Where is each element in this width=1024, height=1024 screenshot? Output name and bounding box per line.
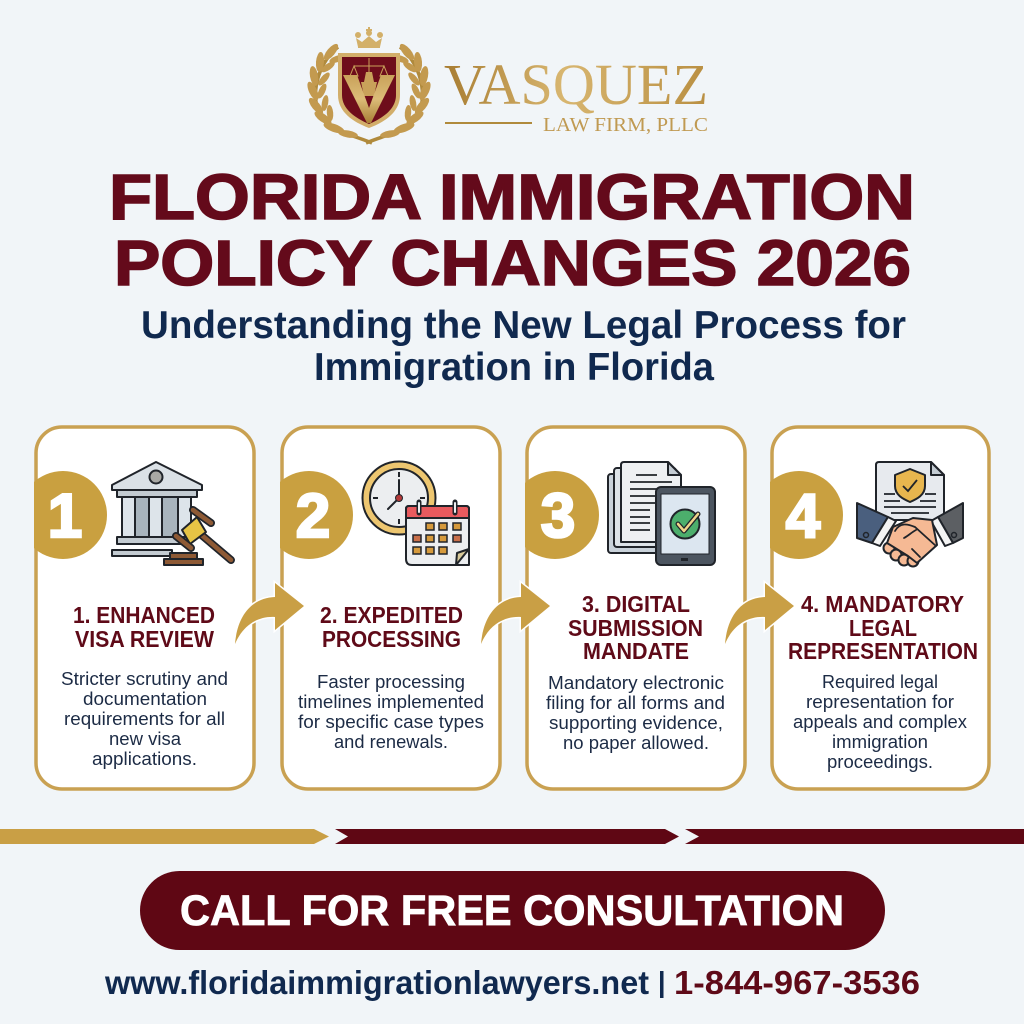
description: Mandatory electronic: [548, 672, 724, 693]
title: FLORIDA IMMIGRATION: [109, 161, 915, 233]
description: supporting evidence,: [549, 712, 723, 733]
heading: 3. DIGITAL: [582, 591, 690, 617]
contact line: www.floridaimmigrationlawyers.net: [104, 964, 649, 1001]
icon: documents and tablet: [608, 462, 715, 565]
arrow: step 2 to 3: [481, 583, 550, 644]
description: appeals and complex: [793, 711, 968, 732]
icon: courthouse and gavel: [112, 462, 231, 565]
icon: shield with scales and V: [338, 53, 400, 128]
panel: step 4 mandatory legal representation: [755, 427, 989, 789]
icon: clock and calendar: [362, 462, 469, 565]
description: applications.: [92, 748, 197, 769]
panel: step 1 enhanced visa review: [19, 427, 254, 789]
heading: [788, 591, 978, 664]
description: [61, 668, 228, 769]
title: [109, 161, 915, 299]
heading: [73, 602, 215, 652]
heading: PROCESSING: [322, 626, 461, 652]
heading: [320, 602, 463, 652]
number badge 1: 1: [48, 482, 82, 551]
description: Faster processing: [317, 671, 465, 692]
logo wordmark: VASQUEZ: [444, 52, 708, 117]
arrow: step 1 to 2: [235, 583, 304, 644]
description: [793, 671, 968, 772]
heading: LEGAL: [849, 615, 917, 641]
heading: VISA REVIEW: [75, 626, 215, 652]
contact line: [104, 964, 920, 1001]
icon: laurel wreath: [305, 42, 433, 143]
call to action button: CALL FOR FREE CONSULTATION: [180, 887, 844, 935]
number badge 3: 3: [541, 482, 575, 551]
description: Stricter scrutiny and: [61, 668, 228, 689]
description: [546, 672, 725, 753]
heading: MANDATE: [583, 638, 689, 664]
icon: crown: [355, 27, 383, 48]
contact line: 1-844-967-3536: [674, 964, 920, 1001]
gold segment: [0, 829, 329, 844]
arrow: step 3 to 4: [725, 583, 794, 644]
heading: [568, 591, 703, 664]
description: representation for: [806, 691, 954, 712]
description: for specific case types: [298, 711, 484, 732]
number badge 1: [34, 471, 107, 559]
heading: SUBMISSION: [568, 615, 703, 641]
maroon segment: [335, 829, 679, 844]
description: filing for all forms and: [546, 692, 725, 713]
title: POLICY CHANGES 2026: [114, 227, 911, 299]
logo wordmark: LAW FIRM, PLLC: [543, 114, 708, 136]
description: and renewals.: [334, 731, 448, 752]
description: requirements for all: [64, 708, 225, 729]
number badge 2: 2: [296, 482, 330, 551]
maroon segment: [685, 829, 1024, 844]
description: no paper allowed.: [563, 732, 709, 753]
heading: REPRESENTATION: [788, 638, 978, 664]
description: immigration: [832, 731, 928, 752]
number badge 4: 4: [786, 482, 821, 551]
heading: 1. ENHANCED: [73, 602, 215, 628]
description: proceedings.: [827, 751, 933, 772]
call to action button: [140, 871, 885, 950]
icon: document and handshake: [857, 462, 963, 566]
subtitle: [141, 304, 906, 389]
number badge 3: [525, 471, 599, 559]
progress bar: [0, 829, 1024, 844]
description: [298, 671, 484, 752]
description: documentation: [83, 688, 207, 709]
logo: Vasquez Law Firm: [305, 27, 708, 143]
panel: step 3 digital submission mandate: [511, 427, 745, 789]
number badge 4: [770, 471, 843, 559]
description: new visa: [109, 728, 182, 749]
description: timelines implemented: [298, 691, 484, 712]
number badge 2: [280, 471, 353, 559]
subtitle: Understanding the New Legal Process for: [141, 304, 906, 347]
heading: 4. MANDATORY: [801, 591, 964, 617]
description: Required legal: [822, 671, 938, 692]
subtitle: Immigration in Florida: [314, 346, 714, 389]
panel: step 2 expedited processing: [265, 427, 500, 789]
heading: 2. EXPEDITED: [320, 602, 463, 628]
